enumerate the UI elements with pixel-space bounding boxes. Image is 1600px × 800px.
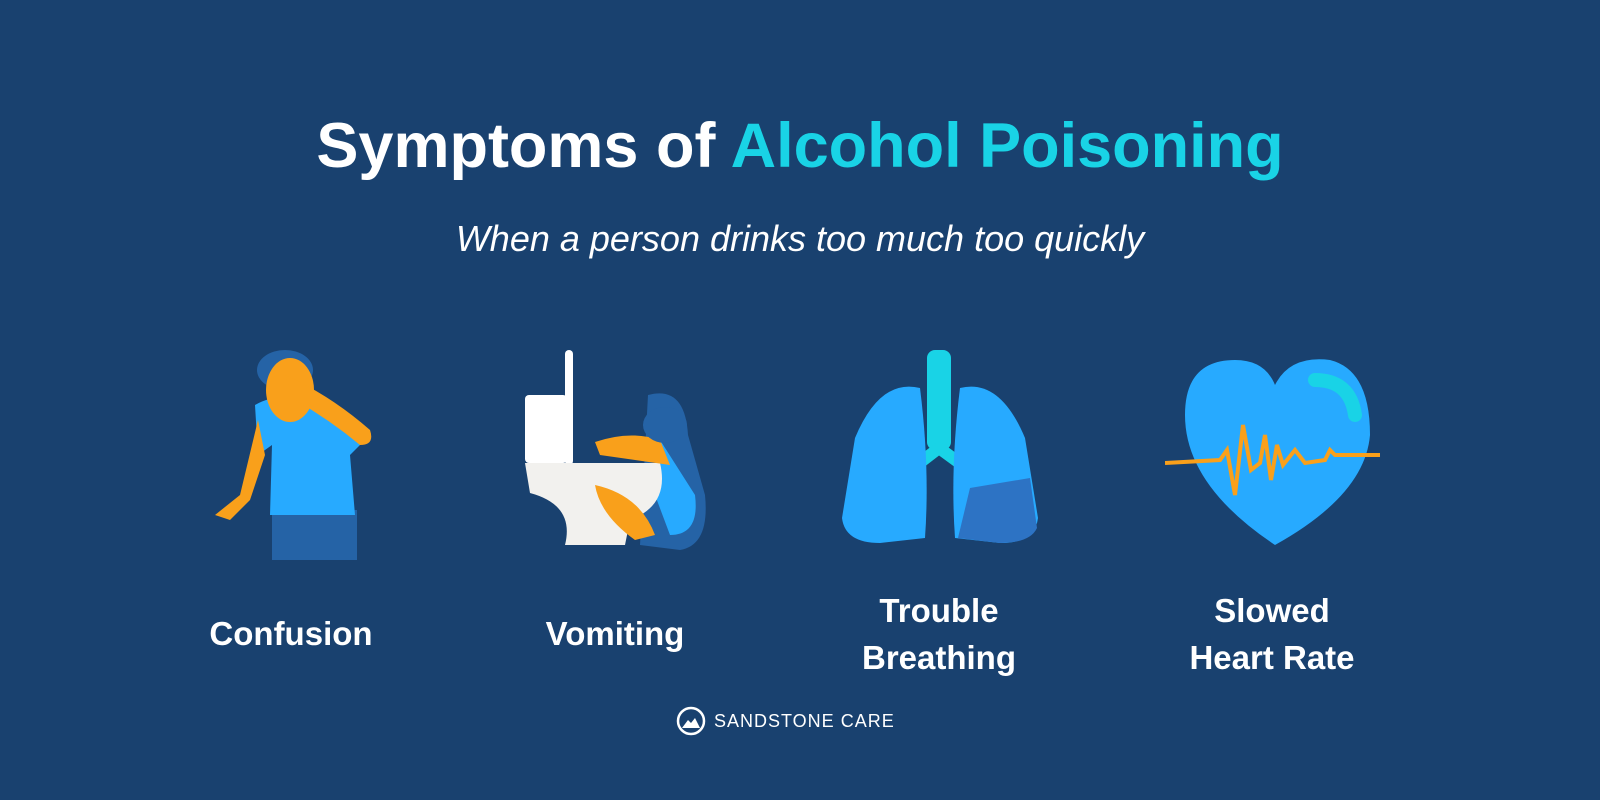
icon: vomiting toilet (525, 350, 706, 550)
label: slowed heart rate: Slowed (1214, 592, 1330, 629)
label: confusion: Confusion (209, 615, 373, 652)
label: trouble breathing: Breathing (862, 639, 1016, 676)
label: slowed heart rate (1189, 592, 1355, 676)
label: slowed heart rate: Heart Rate (1189, 639, 1355, 676)
logo: SANDSTONE CARE (714, 710, 895, 730)
title: Symptoms of Alcohol Poisoning (316, 111, 1284, 181)
icon: confused man (215, 350, 372, 560)
label: trouble breathing: Trouble (879, 592, 999, 629)
label: vomiting: Vomiting (546, 615, 684, 652)
icon: heart with ECG (1165, 359, 1380, 545)
icon: lungs (842, 350, 1038, 543)
subtitle: When a person drinks too much too quickly (456, 218, 1144, 259)
logo (676, 706, 895, 736)
label: trouble breathing (862, 592, 1016, 676)
